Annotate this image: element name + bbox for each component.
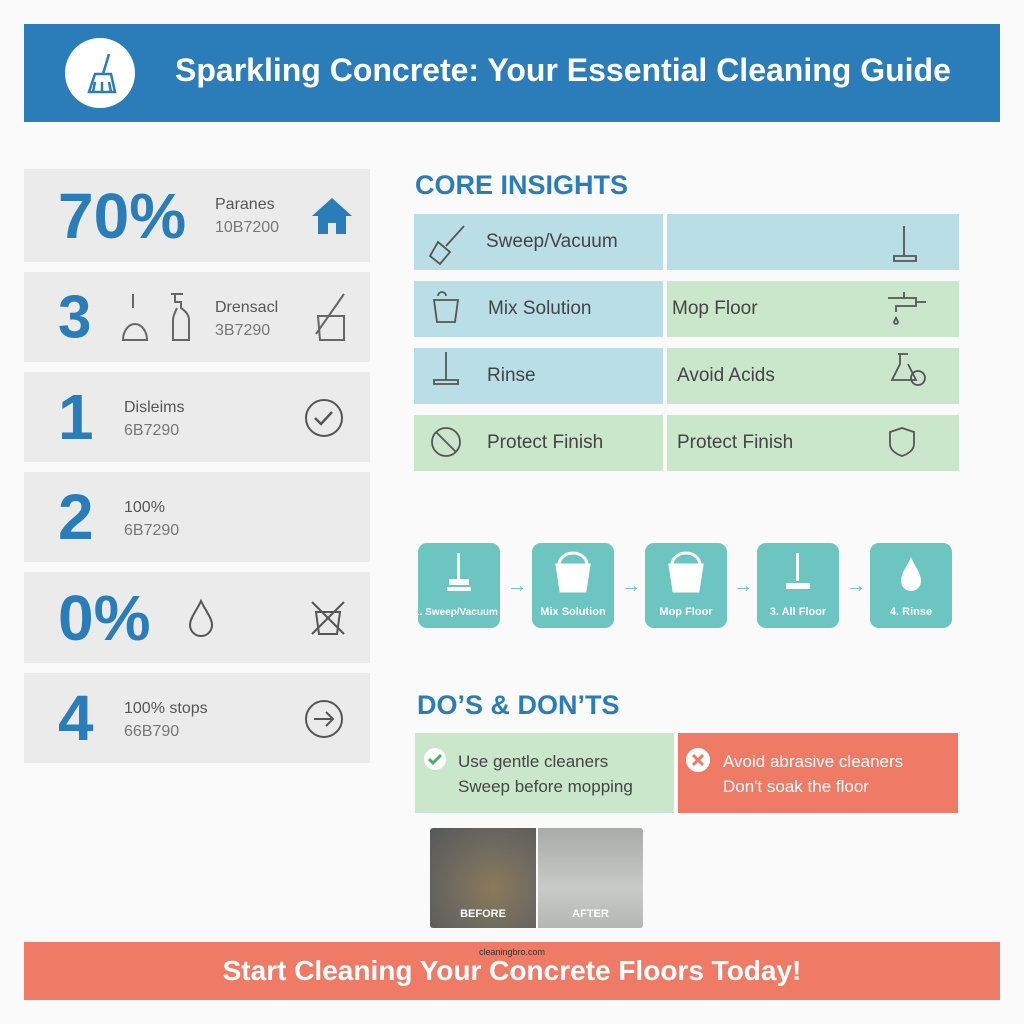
insights grid: Rinse xyxy=(487,365,536,386)
before/after photo: AFTER xyxy=(572,908,609,920)
stat card 4: 2 xyxy=(58,481,94,553)
insights grid: Mix Solution xyxy=(488,298,592,319)
process steps: Mix Solution xyxy=(540,606,606,618)
icon: broom xyxy=(65,38,135,108)
dont box: Don't soak the floor xyxy=(723,777,869,796)
header banner xyxy=(24,24,1000,122)
stat card 6: 4 xyxy=(58,682,94,754)
dont box: Avoid abrasive cleaners xyxy=(723,752,903,771)
stat card 3 xyxy=(24,372,370,462)
stat card 2: 3B7290 xyxy=(215,322,270,339)
icon: dustpan and spray xyxy=(122,293,190,341)
stat card 1: 70% xyxy=(58,180,186,252)
icon: check circle xyxy=(305,399,343,437)
stat card 6 xyxy=(24,673,370,763)
process steps: → xyxy=(846,575,866,597)
dont box xyxy=(678,733,958,813)
footer banner xyxy=(24,942,1000,1000)
footer banner: Start Cleaning Your Concrete Floors Today! xyxy=(223,955,801,986)
icon: drop xyxy=(189,598,213,637)
process steps: → xyxy=(621,575,641,597)
stat card 6: 66B790 xyxy=(124,723,179,740)
process steps: → xyxy=(507,575,527,597)
heading: core insights: CORE INSIGHTS xyxy=(415,170,628,200)
before/after photo xyxy=(430,828,643,928)
stat card 5: 0% xyxy=(58,582,150,654)
stat card 4 xyxy=(24,472,370,562)
do box: Sweep before mopping xyxy=(458,777,633,796)
stat card 3: 1 xyxy=(58,381,94,453)
icon: house xyxy=(312,198,352,234)
stat card 1: 10B7200 xyxy=(215,219,279,236)
stat card 2: 3 xyxy=(58,284,91,350)
icon: crossed bucket xyxy=(311,601,345,635)
stat card 2 xyxy=(24,272,370,362)
icon: mop bucket xyxy=(315,293,345,341)
do box: Use gentle cleaners xyxy=(458,752,608,771)
stat card 4: 100% xyxy=(124,499,165,516)
insights grid: Protect Finish xyxy=(487,432,603,453)
process steps: → xyxy=(733,575,753,597)
process steps xyxy=(418,543,952,628)
insights grid: Avoid Acids xyxy=(677,365,775,386)
stat card 3: Disleims xyxy=(124,399,184,416)
stat card 5 xyxy=(24,572,370,663)
insights grid: Protect Finish xyxy=(677,432,793,453)
do box xyxy=(415,733,674,813)
stat card 1 xyxy=(24,169,370,262)
heading: dos and donts: DO’S & DON’TS xyxy=(417,690,620,720)
stat card 6: 100% stops xyxy=(124,700,208,717)
stat card 1: Paranes xyxy=(215,196,275,213)
process steps: 3. All Floor xyxy=(770,606,826,618)
stat card 4: 6B7290 xyxy=(124,522,179,539)
stat card 2: Drensacl xyxy=(215,299,278,316)
process steps: Mop Floor xyxy=(659,606,713,618)
before/after photo: BEFORE xyxy=(460,908,506,920)
stat card 3: 6B7290 xyxy=(124,422,179,439)
footer banner: cleaningbro.com xyxy=(479,947,545,957)
process steps: 4. Rinse xyxy=(890,606,932,618)
insights grid: Sweep/Vacuum xyxy=(486,231,618,252)
icon: arrow circle xyxy=(305,700,343,738)
title: Sparkling Concrete: Your Essential Cleaning Guide xyxy=(175,52,951,88)
insights grid xyxy=(414,214,959,471)
insights grid: Mop Floor xyxy=(672,298,758,319)
